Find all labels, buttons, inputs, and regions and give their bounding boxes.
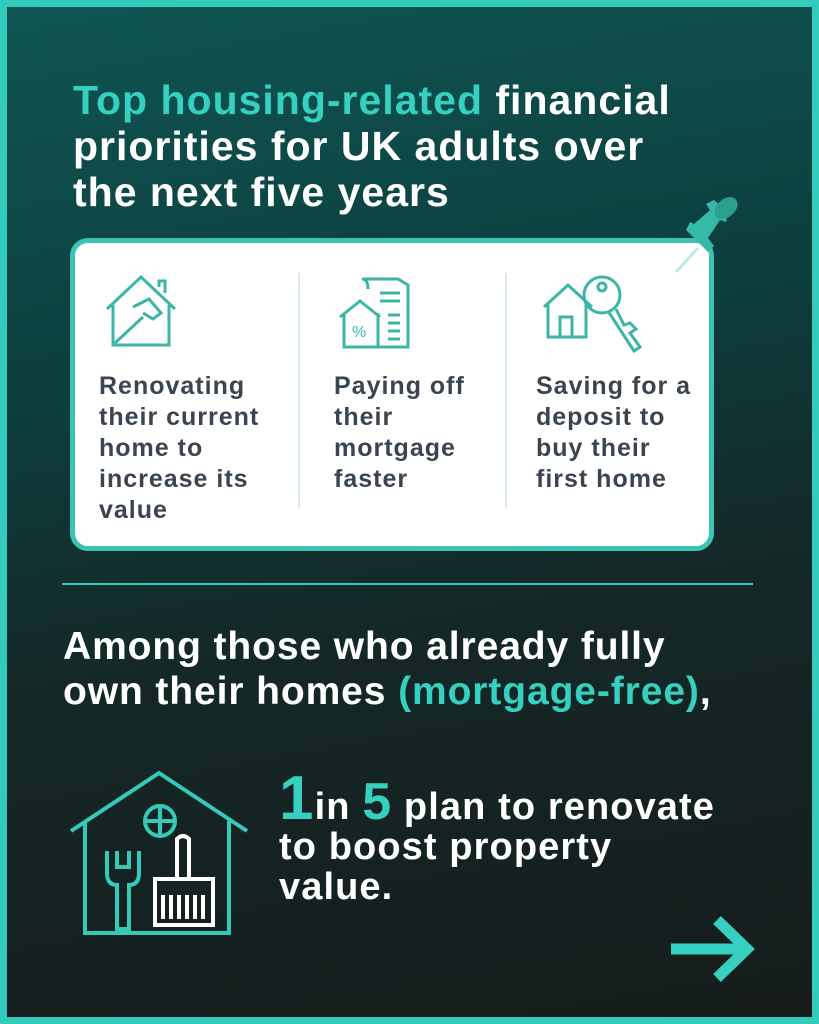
text: Saving for a bbox=[536, 372, 691, 400]
heading: mortgage-free: own their homes (mortgage-free), bbox=[63, 670, 712, 713]
stat text: value. bbox=[279, 866, 393, 908]
stat text bbox=[279, 764, 715, 908]
column: mortgage bbox=[334, 278, 465, 493]
icon: house with hammer bbox=[106, 275, 176, 346]
text: mortgage bbox=[334, 434, 456, 462]
panel: priorities card bbox=[70, 238, 714, 551]
column: renovating bbox=[99, 275, 259, 524]
text bbox=[334, 372, 465, 493]
text: buy their bbox=[536, 434, 651, 462]
text: increase its bbox=[99, 465, 249, 493]
icon: push pin bbox=[675, 197, 738, 273]
text bbox=[99, 372, 259, 524]
text: Renovating bbox=[99, 372, 245, 400]
title bbox=[73, 77, 671, 215]
stat text: to boost property bbox=[279, 826, 612, 868]
text: deposit to bbox=[536, 403, 665, 431]
icon: house with tools bbox=[70, 770, 248, 935]
icon: house with document: % bbox=[352, 324, 366, 341]
stat text: 1in 5 plan to renovate bbox=[279, 764, 715, 833]
title: Top housing-related financial bbox=[73, 77, 671, 123]
text: home to bbox=[99, 434, 203, 462]
heading: mortgage-free bbox=[63, 625, 712, 713]
text: their current bbox=[99, 403, 259, 431]
title: priorities for UK adults over bbox=[73, 123, 644, 169]
icon: house with key bbox=[543, 276, 642, 354]
text bbox=[536, 372, 691, 493]
arrow bbox=[671, 916, 755, 982]
divider bbox=[62, 583, 753, 585]
title: the next five years bbox=[73, 169, 450, 215]
text: Paying off bbox=[334, 372, 465, 400]
icon: house with document bbox=[339, 278, 410, 348]
text: their bbox=[334, 403, 393, 431]
column: deposit bbox=[536, 276, 691, 493]
text: first home bbox=[536, 465, 667, 493]
text: value bbox=[99, 496, 168, 524]
text: faster bbox=[334, 465, 408, 493]
heading: mortgage-free: Among those who already fully bbox=[63, 625, 666, 668]
